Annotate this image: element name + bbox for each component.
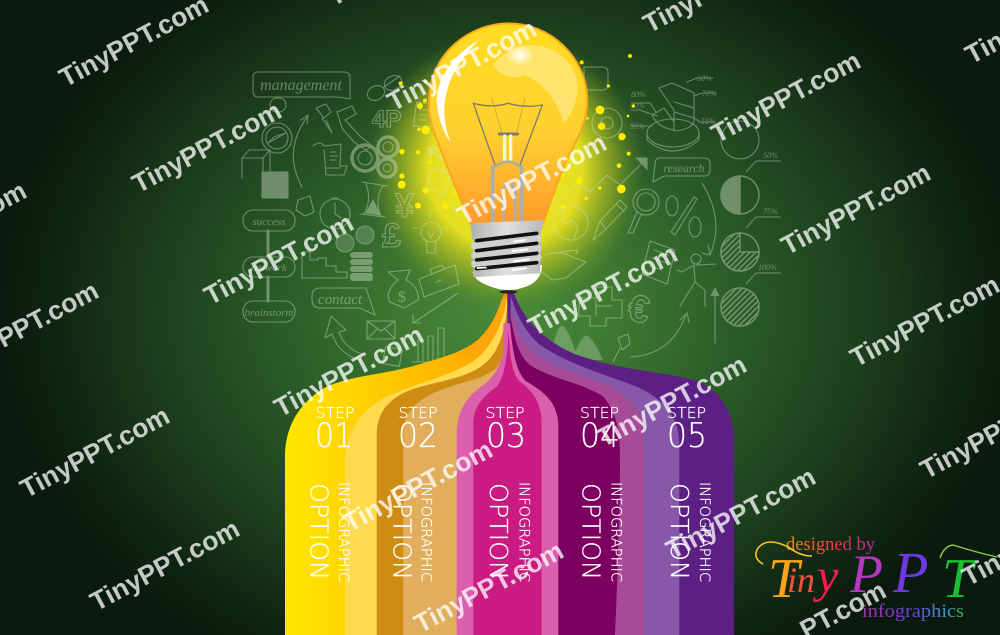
doodle: 4P label: 4P bbox=[372, 106, 401, 133]
doodle: push pin bbox=[316, 104, 332, 133]
doodle: management bubble: management bbox=[260, 77, 342, 94]
doodle: research bubble: research bbox=[663, 161, 705, 175]
logo wordmark: in bbox=[787, 560, 815, 600]
repeated TinyPPT.com watermark: TinyPPT.com bbox=[523, 238, 682, 342]
doodle: puzzle bbox=[578, 287, 622, 326]
step 1 labels: 01 bbox=[315, 416, 353, 456]
doodle: runner bbox=[677, 254, 716, 306]
repeated TinyPPT.com watermark: TinyPPT.com bbox=[776, 157, 935, 261]
logo wordmark: P bbox=[892, 540, 928, 605]
doodle: gears bbox=[352, 137, 398, 177]
step 4 labels: INFOGRAPHIC bbox=[608, 482, 624, 582]
step 4 labels bbox=[577, 404, 624, 582]
doodle: distribution curves bbox=[550, 326, 603, 360]
doodle: chart percent labels: 70% bbox=[702, 89, 717, 98]
ribbon: dark gold step 2 bbox=[377, 307, 509, 635]
white crescent highlight bbox=[437, 40, 479, 143]
screw base bbox=[470, 220, 544, 294]
repeated TinyPPT.com watermark: TinyPPT.com bbox=[127, 95, 286, 199]
doodle: pie top bbox=[721, 121, 759, 159]
repeated TinyPPT.com watermark: TinyPPT.com bbox=[338, 434, 497, 538]
doodle: chart percent labels: 90% bbox=[630, 101, 645, 110]
doodle: envelope bbox=[367, 321, 395, 339]
doodle: sweep arrow bbox=[630, 313, 689, 357]
doodle: pound sign: £ bbox=[382, 217, 401, 255]
step 2 labels: OPTION bbox=[387, 483, 416, 580]
repeated TinyPPT.com watermark: TinyPPT.com bbox=[845, 269, 1000, 373]
logo line: infographics: infographics bbox=[862, 601, 964, 622]
doodle: yen sign: ¥ bbox=[395, 187, 414, 225]
logo wordmark bbox=[756, 540, 997, 610]
ribbon: light yellow bbox=[345, 297, 509, 635]
step 2 labels: STEP bbox=[398, 404, 438, 422]
doodle: chart percent labels: 55% bbox=[701, 117, 716, 126]
logo wordmark: y bbox=[812, 550, 839, 603]
doodle: idea bubble bbox=[580, 67, 608, 90]
doodle: up arrow bbox=[711, 288, 719, 343]
doodle: contact bubble: contact bbox=[318, 292, 363, 308]
step 3 labels: OPTION bbox=[484, 483, 513, 580]
doodle: coins bbox=[336, 226, 374, 252]
doodle: globe bbox=[554, 206, 588, 240]
doodle: pie 75 percent bbox=[721, 207, 781, 271]
ribbon: light pink left bbox=[457, 327, 509, 635]
doodle: shield bbox=[296, 196, 314, 216]
repeated TinyPPT.com watermark: TinyPPT.com bbox=[706, 45, 865, 149]
ribbon: lavender bbox=[511, 295, 679, 635]
step 3 labels bbox=[484, 404, 531, 582]
step 3 labels: 03 bbox=[486, 416, 526, 456]
step 4 labels: OPTION bbox=[577, 483, 606, 580]
step 1 labels: STEP bbox=[316, 404, 354, 422]
repeated TinyPPT.com watermark: TinyPPT.com bbox=[592, 349, 751, 453]
doodle: pie 75 percent: 75% bbox=[763, 207, 778, 216]
step 5 labels bbox=[665, 404, 712, 582]
ribbon: yellow step 1 bbox=[285, 292, 513, 635]
ribbon: plum step 4 bbox=[509, 317, 620, 635]
doodle: contact bubble bbox=[312, 288, 375, 315]
doodle: zigzag growth arrow bbox=[545, 158, 647, 213]
ribbon: orange peak accent bbox=[457, 297, 507, 358]
doodle: hourglass bbox=[360, 182, 387, 217]
step 5 labels: OPTION bbox=[665, 483, 694, 580]
doodle: chart percent labels: 80% bbox=[631, 90, 646, 99]
step 5 labels: INFOGRAPHIC bbox=[696, 482, 712, 582]
doodle: chart percent labels: 60% bbox=[697, 74, 712, 83]
logo wordmark: P bbox=[849, 544, 883, 604]
doodle: pie 100 percent: 100% bbox=[758, 263, 777, 272]
filament bbox=[473, 98, 542, 221]
doodle: chart percent labels: 95% bbox=[630, 122, 645, 131]
logo wordmark: T bbox=[768, 548, 803, 610]
doodle: briefcase bbox=[419, 265, 459, 297]
step 3 labels: INFOGRAPHIC bbox=[515, 482, 531, 582]
step 1 labels bbox=[305, 404, 354, 582]
ribbon: mauve bbox=[511, 307, 643, 635]
step 3 labels: STEP bbox=[486, 404, 524, 422]
doodle: handshake bbox=[542, 250, 586, 280]
doodle: pie 100 percent bbox=[721, 263, 781, 326]
ribbon: tan bbox=[403, 323, 509, 635]
step 1 labels: OPTION bbox=[305, 483, 334, 580]
step 2 labels: INFOGRAPHIC bbox=[418, 482, 434, 582]
doodle: flow chart pills bbox=[243, 210, 295, 322]
step 5 labels: 05 bbox=[667, 416, 707, 456]
doodle: flow chart pills: success bbox=[252, 216, 286, 228]
business doodles bbox=[242, 67, 781, 366]
white spark highlight bbox=[506, 44, 534, 66]
bulb glass bbox=[429, 23, 587, 223]
doodle: management bubble bbox=[253, 72, 350, 99]
doodle: chart percent labels bbox=[630, 74, 717, 131]
doodle: money bag: $ bbox=[398, 289, 406, 306]
doodle: notebook bbox=[642, 241, 675, 284]
doodle: pin lower bbox=[613, 334, 630, 362]
repeated TinyPPT.com watermark: TinyPPT.com bbox=[15, 400, 174, 504]
repeated TinyPPT.com watermark: TinyPPT.com bbox=[382, 13, 541, 117]
doodle: pie 50 percent bbox=[721, 151, 781, 214]
step 2 labels bbox=[387, 404, 438, 582]
repeated TinyPPT.com watermark: TinyPPT.com bbox=[269, 319, 428, 423]
ribbons: five colour streams flowing from the bulb bbox=[285, 292, 734, 635]
repeated TinyPPT.com watermark: TinyPPT.com bbox=[199, 207, 358, 311]
doodle: research bubble bbox=[653, 158, 710, 182]
doodle: recycling arrow bbox=[325, 316, 402, 366]
repeated TinyPPT.com watermark: TinyPPT.com bbox=[661, 461, 820, 565]
doodle: money bag bbox=[388, 270, 418, 308]
repeated TinyPPT.com watermark: TinyPPT.com bbox=[452, 127, 611, 231]
doodle: 3D pie chart bbox=[631, 78, 716, 151]
doodle: long arrow bbox=[413, 293, 458, 323]
ribbon: light pink right bbox=[503, 323, 558, 635]
doodle: stopwatch bbox=[320, 198, 350, 229]
doodle: pencil bbox=[593, 200, 627, 240]
doodle: percent sign bbox=[666, 196, 701, 237]
doodle: euro sign: € bbox=[625, 288, 652, 332]
light bulb bbox=[429, 23, 587, 294]
doodle: scroll bbox=[313, 143, 347, 175]
doodle: pie 50 percent: 50% bbox=[763, 151, 778, 160]
doodle: cubes bbox=[242, 150, 288, 198]
doodle: hand bbox=[337, 106, 372, 150]
doodle: flow chart pills: network bbox=[251, 262, 288, 274]
logo wordmark: T bbox=[942, 548, 977, 610]
step 5 labels: STEP bbox=[667, 404, 706, 422]
doodle: curved arrow bbox=[293, 115, 308, 187]
bulb glow bbox=[365, 30, 645, 310]
ribbon: magenta step 3 bbox=[473, 330, 542, 635]
doodle: arc arrow bbox=[702, 183, 716, 255]
doodle: stairs bbox=[302, 252, 347, 278]
doodle: target bbox=[592, 108, 622, 138]
step 1 labels: INFOGRAPHIC bbox=[335, 482, 351, 582]
glass reflection bbox=[493, 45, 577, 123]
ribbon: outer purple step 5 bbox=[507, 292, 734, 635]
doodle: sticky note bbox=[426, 148, 450, 194]
doodle: bar chart bbox=[412, 328, 452, 362]
logo line: designed by: designed by bbox=[786, 534, 875, 555]
step 4 labels: STEP bbox=[580, 404, 619, 422]
step 4 labels: 04 bbox=[580, 416, 620, 456]
logo: designed by TinyPPT infographics bbox=[756, 534, 997, 622]
doodle: flow chart pills: brainstorm bbox=[245, 307, 294, 319]
doodle: compass bbox=[262, 98, 292, 153]
doodle: document bbox=[413, 102, 434, 128]
repeated TinyPPT.com watermark: TinyPPT.com bbox=[85, 513, 244, 617]
doodle: magnifier bbox=[628, 189, 659, 233]
step 2 labels: 02 bbox=[398, 416, 438, 456]
doodle: coin stack bbox=[350, 252, 373, 281]
doodle: idea bulb bbox=[413, 212, 449, 253]
doodle: glasses bbox=[365, 73, 404, 103]
sparkle dots bbox=[398, 54, 635, 210]
